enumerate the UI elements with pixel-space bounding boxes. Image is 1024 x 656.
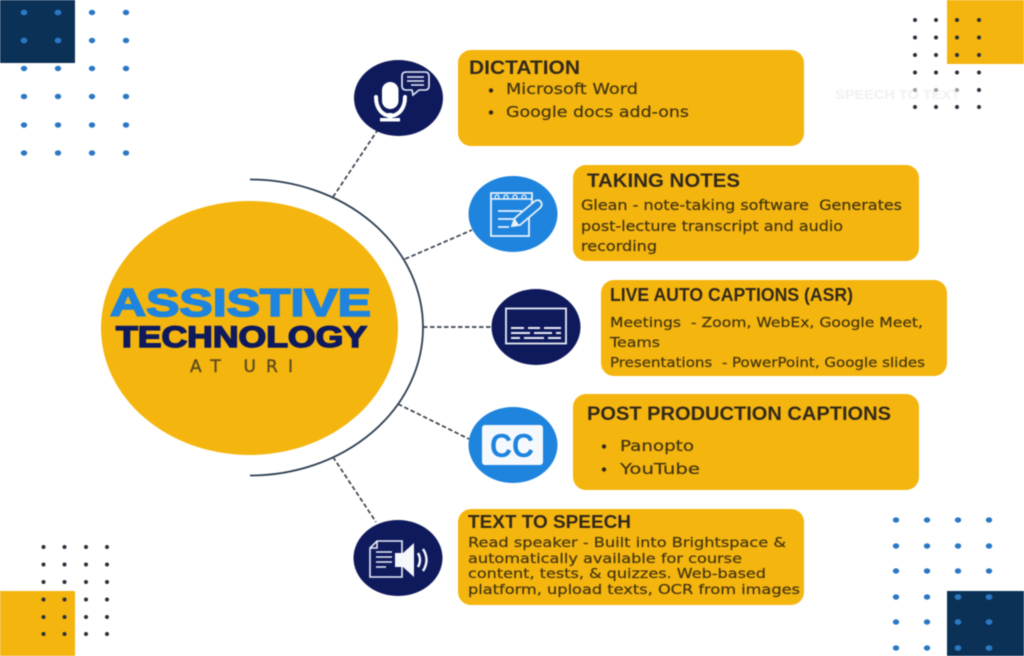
text: text to speech description (468, 535, 800, 598)
list: dictation tools (489, 80, 689, 121)
list: dictation tools: Microsoft Word (506, 80, 638, 98)
decoration: top-left navy square with blue dots (0, 0, 129, 156)
icon: closed captions: CC (490, 427, 534, 464)
heading: dictation: DICTATION (469, 58, 580, 79)
icon: closed captions (468, 407, 558, 483)
list: caption platforms: YouTube (619, 460, 700, 478)
text: text to speech description: automatically available for course (468, 551, 742, 567)
text: live captions platforms: Meetings - Zoom, WebEx, Google Meet, (610, 315, 923, 331)
text: live captions platforms (609, 315, 925, 371)
arc around central circle (250, 180, 423, 476)
panel: taking notes (573, 165, 919, 261)
list: caption platforms: Panopto (620, 437, 694, 455)
text: taking notes description: post-lecture transcript and audio (581, 219, 843, 235)
subtitle: at URI: AT URI (190, 357, 293, 377)
text: text to speech description: content, tests, & quizzes. Web-based (468, 566, 766, 582)
title: Technology: TECHNOLOGY (116, 321, 367, 354)
heading: taking notes: TAKING NOTES (587, 171, 740, 192)
dashed connector lines (333, 131, 492, 522)
panel: text to speech (458, 509, 804, 605)
text: text to speech description: Read speaker - Built into Brightspace & (468, 535, 787, 551)
text: taking notes description: recording (581, 239, 657, 255)
text: live captions platforms: Presentations - PowerPoint, Google slides (610, 355, 925, 371)
heading: live auto captions: LIVE AUTO CAPTIONS (ASR) (610, 285, 853, 305)
icon: document with speaker (354, 520, 442, 596)
decoration: bottom-right navy square with blue dots (893, 517, 1024, 656)
panel: live auto captions (601, 280, 947, 376)
text: taking notes description (581, 198, 902, 255)
list: dictation tools: Google docs add-ons (506, 103, 689, 121)
panel: post production captions (573, 394, 919, 490)
text: text to speech description: platform, upload texts, OCR from images (468, 582, 800, 598)
decoration: top-right gold square with dark dots (835, 0, 1024, 109)
text: live captions platforms: Teams (609, 335, 660, 351)
icon: notepad and pencil (468, 176, 558, 252)
icon: microphone with speech bubble (354, 60, 443, 136)
decoration: bottom-left gold square with dark dots (0, 545, 109, 656)
title: Assistive: ASSISTIVE (110, 282, 371, 325)
heading: post production captions: POST PRODUCTION CAPTIONS (587, 404, 891, 425)
central circle with title (101, 201, 398, 455)
decoration: top-right gold square with dark dots: SPEECH TO TEXT (835, 87, 960, 102)
panel: dictation (458, 50, 804, 146)
list: caption platforms (602, 437, 700, 478)
icon: caption screen (492, 289, 580, 365)
heading: text to speech: TEXT TO SPEECH (468, 512, 631, 532)
text: taking notes description: Glean - note-taking software Generates (581, 198, 902, 214)
